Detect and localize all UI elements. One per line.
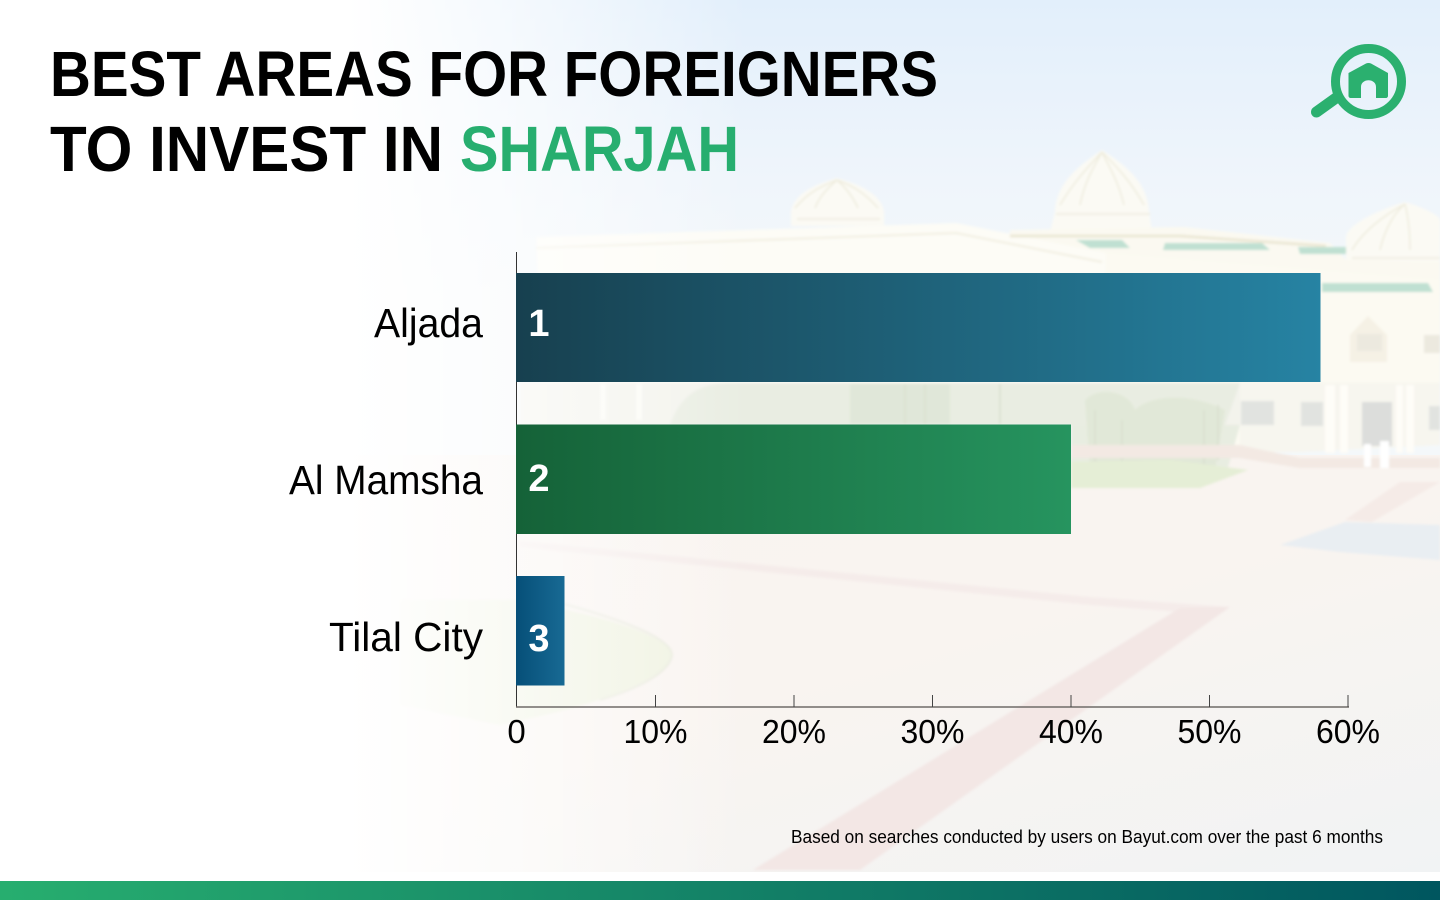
title xyxy=(50,38,938,185)
category labels: Tilal City xyxy=(329,614,483,660)
value axis xyxy=(516,695,1349,707)
title: BEST AREAS FOR FOREIGNERS xyxy=(50,38,938,110)
axis labels: 10% xyxy=(624,713,688,750)
category axis xyxy=(516,252,518,707)
domes xyxy=(791,150,1440,262)
tree band xyxy=(594,384,1238,424)
lawn circle xyxy=(559,614,670,708)
axis labels: 0 xyxy=(507,713,526,750)
background: faded mosque photograph xyxy=(464,0,1440,872)
bar: Tilal City: 3 xyxy=(528,618,550,660)
icon: magnifier house logo xyxy=(1316,48,1402,114)
bar: Al Mamsha: 2 xyxy=(528,458,550,500)
axis labels: 50% xyxy=(1178,713,1242,750)
building walls and roof xyxy=(1012,228,1438,278)
people xyxy=(1364,441,1389,468)
arches and windows xyxy=(1350,316,1440,362)
axis labels xyxy=(507,713,1380,750)
green roof tiles xyxy=(1076,240,1433,292)
axis labels: 40% xyxy=(1039,713,1103,750)
bar chart xyxy=(289,252,1380,750)
lawn xyxy=(1071,460,1248,488)
category labels: Al Mamsha xyxy=(289,457,483,503)
footer gradient bar xyxy=(0,881,1440,900)
title: SHARJAH xyxy=(460,113,739,185)
bar: Tilal City xyxy=(516,576,564,686)
axis labels: 30% xyxy=(900,713,964,750)
lower white wall and doorway xyxy=(1240,383,1440,452)
bar: Aljada xyxy=(516,273,1320,382)
category labels: Aljada xyxy=(374,300,483,346)
left white fade xyxy=(0,0,650,872)
pavement markings xyxy=(520,541,1230,612)
bar: Al Mamsha xyxy=(516,424,1071,534)
bar: Aljada: 1 xyxy=(528,303,550,345)
footnote: Based on searches conducted by users on Bayut.com over the past 6 months xyxy=(791,827,1383,847)
title: TO INVEST IN xyxy=(50,113,443,185)
axis labels: 20% xyxy=(762,713,826,750)
category labels xyxy=(289,300,483,660)
axis labels: 60% xyxy=(1316,713,1380,750)
steps xyxy=(1071,445,1440,468)
